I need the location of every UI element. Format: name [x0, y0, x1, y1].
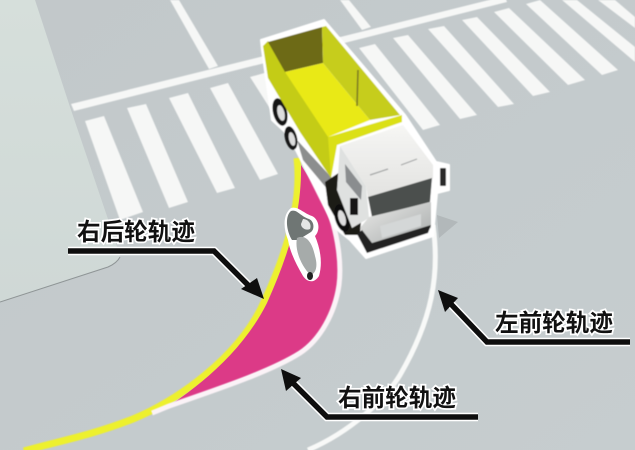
right rear wheel track (yellow): [24, 158, 298, 450]
cab side window: [345, 164, 362, 200]
stop line: [71, 0, 507, 111]
bumper: [357, 225, 431, 253]
stakes: [357, 70, 358, 106]
callout arrow: left front track: [438, 290, 630, 342]
cab roof: [340, 125, 434, 198]
lane line left: [170, 0, 218, 69]
left front wheel track: [308, 225, 435, 450]
grille plate: [380, 214, 421, 238]
lane line right: [340, 0, 371, 30]
front wheel: [331, 203, 353, 233]
callout arrow: right front track: [281, 369, 478, 417]
cargo bed left wall: [263, 41, 331, 178]
crosswalk stripes right: [359, 0, 635, 130]
chassis: [297, 140, 340, 195]
truck white outline: [261, 20, 449, 258]
cargo bed right wall: [322, 26, 400, 120]
scooter body: [296, 237, 316, 275]
windshield: [368, 178, 432, 217]
rider shirt: [301, 219, 311, 230]
rider body: [287, 211, 313, 240]
sidewalk corner: [0, 0, 120, 302]
callout label: right rear track: 右后轮轨迹: [77, 219, 195, 246]
cargo bed floor: [285, 63, 370, 137]
curb line: [0, 257, 120, 302]
right mirror: [433, 166, 447, 188]
truck shadow: [437, 215, 458, 238]
right front wheel track (white): [152, 198, 340, 413]
headboard: [328, 115, 402, 178]
rider outline: [285, 208, 321, 281]
callout label: left front track: 左前轮轨迹: [495, 310, 613, 337]
cab front face: [360, 202, 431, 246]
cargo bed rear wall: [268, 27, 323, 72]
left mirror: [350, 198, 358, 215]
cab side: [337, 146, 369, 228]
dump truck: [261, 20, 449, 258]
road markings: [71, 0, 635, 220]
danger zone between tracks: [172, 165, 339, 404]
crosswalk stripes left: [85, 72, 305, 220]
callout label: right front track: 右前轮轨迹: [338, 385, 456, 412]
scooter rider: [285, 208, 321, 281]
rear wheels: [270, 97, 300, 151]
callout arrow: right rear track: [68, 251, 264, 299]
front wheel: [307, 272, 313, 280]
